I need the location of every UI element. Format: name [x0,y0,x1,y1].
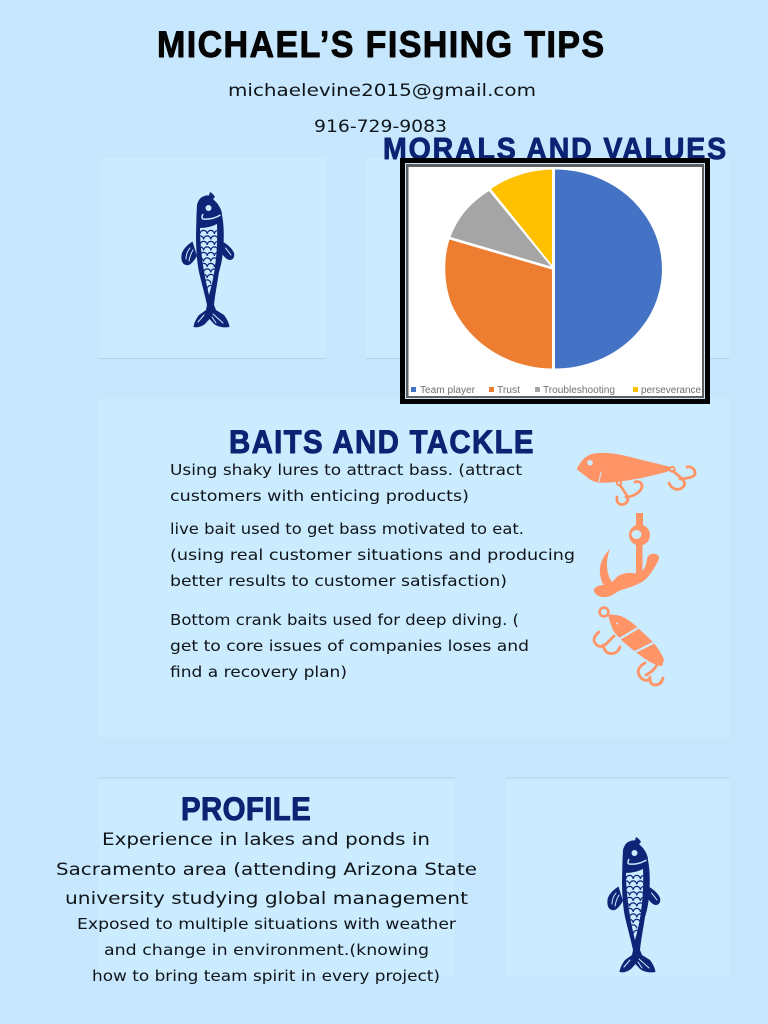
text: experience [56,830,477,909]
contact email: michaelevine2015@gmail.com [228,81,536,101]
heading: morals and values: MORALS AND VALUES [383,132,726,166]
contact phone: 916-729-9083 [314,117,447,137]
text: shaky lures [170,461,522,505]
title: MICHAEL’S FISHING TIPS [157,24,604,65]
text: exposure: and change in environment.(knowing [104,941,429,959]
text: crank baits: get to core issues of companies loses and [170,637,529,655]
pie slice: perseverance [491,170,552,265]
chart legend: Trust [497,385,520,396]
heading: baits and tackle: BAITS AND TACKLE [229,424,534,460]
pie slice: troubleshooting [450,191,551,266]
chart legend [411,385,701,396]
text: experience: Sacramento area (attending Arizona State [56,860,477,880]
chart legend: Team player [420,385,476,396]
text: live bait: better results to customer satisfaction) [170,572,507,590]
pie slice: trust [445,240,552,368]
text: shaky lures: customers with enticing products) [170,487,469,505]
text: exposure: how to bring team spirit in every project) [92,967,440,985]
chart legend: Troubleshooting [543,385,615,396]
heading: profile: PROFILE [181,791,311,827]
text: crank baits: Bottom crank baits used for deep diving. ( [170,611,519,629]
panel: baits and tackle [99,399,729,737]
text: live bait: (using real customer situations and producing [170,546,575,564]
panel: fish tile bottom [506,778,729,976]
text: shaky lures: Using shaky lures to attract bass. (attract [170,461,522,479]
text: exposure [77,915,457,985]
pie chart with frame [400,158,710,404]
text: experience: Experience in lakes and ponds in [102,830,430,850]
icon: hook with worm [594,513,659,597]
panel: profile [99,778,455,976]
icon: fish bottom [607,837,660,972]
panel: fish tile top [100,158,325,358]
text: live bait [170,520,575,590]
text: experience: university studying global management [65,889,468,909]
icon: crank bait [594,608,664,685]
chart legend: perseverance [641,385,701,396]
icon: shaky lure [577,453,695,505]
text: crank baits [170,611,529,681]
panel: morals backing tile [366,158,729,358]
icon: fish top [181,192,234,327]
text: crank baits: find a recovery plan) [170,663,347,681]
text: exposure: Exposed to multiple situations with weather [77,915,457,933]
text: live bait: live bait used to get bass motivated to eat. [170,520,524,538]
pie slice: team player [555,170,662,368]
